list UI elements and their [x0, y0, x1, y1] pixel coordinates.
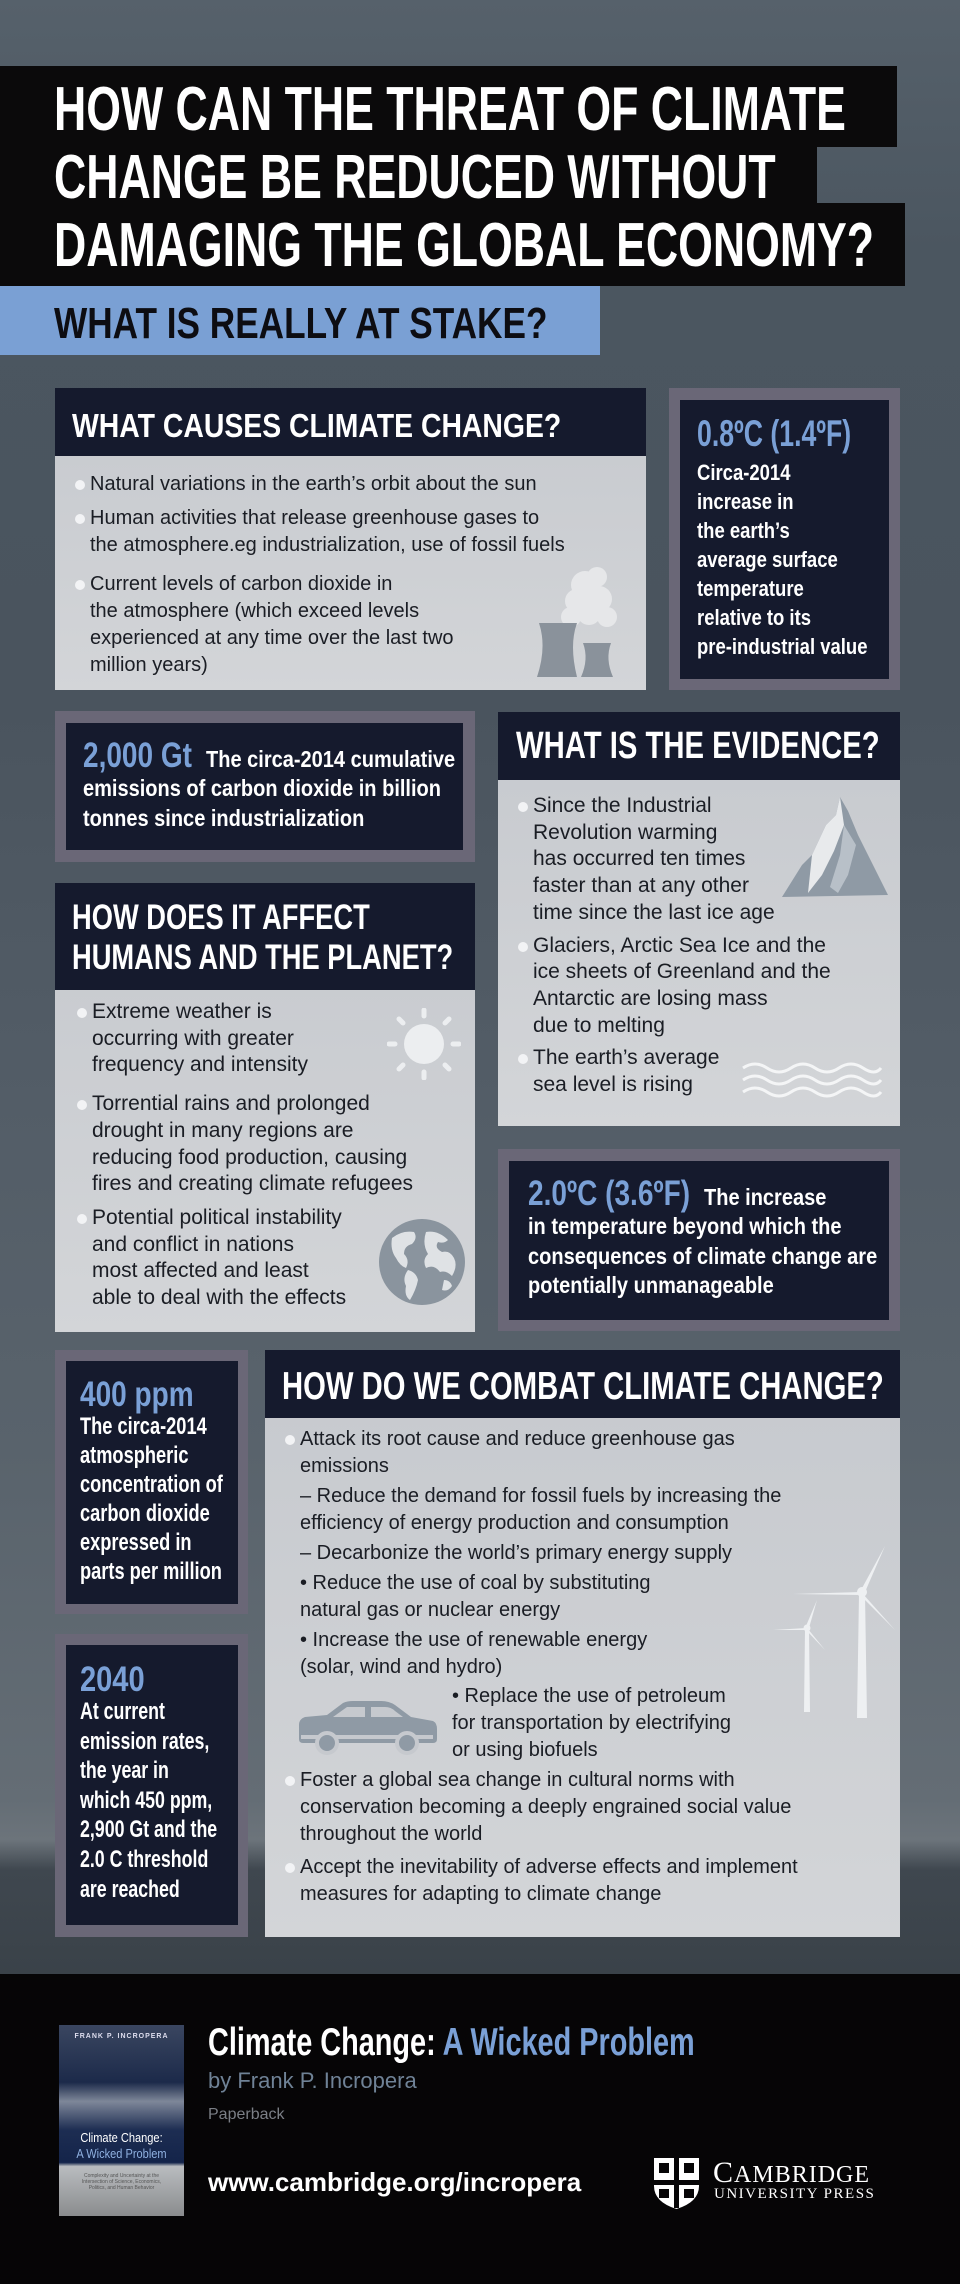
- stat: 2000 Gt: [55, 711, 475, 862]
- heading: humans: HOW DOES IT AFFECT: [72, 898, 370, 937]
- text: humans bullets: fires and creating climate refugees: [92, 1172, 413, 1195]
- heading: combat: [265, 1350, 900, 1418]
- stat: 0.8C: relative to its: [697, 605, 811, 630]
- book cover: FRANK P. INCROPERA: [74, 2033, 169, 2040]
- title: DAMAGING THE GLOBAL ECONOMY?: [54, 211, 874, 280]
- text: combat bullets: natural gas or nuclear energy: [300, 1599, 560, 1621]
- text: humans bullets: Potential political instability: [92, 1206, 342, 1229]
- text: causes bullets: the atmosphere (which exceed levels: [90, 600, 419, 622]
- text: evidence bullets: ice sheets of Greenland and the: [533, 960, 831, 983]
- panel: combat: [265, 1350, 900, 1937]
- footer: [0, 1974, 960, 2284]
- text: evidence bullets: [518, 794, 831, 1096]
- panel: evidence: [498, 712, 900, 1126]
- stat: 400 ppm: concentration of: [80, 1471, 223, 1498]
- book cover: Politics, and Human Behavior: [89, 2185, 154, 2191]
- text: humans bullets: drought in many regions are: [92, 1119, 354, 1142]
- text: humans bullets: most affected and least: [92, 1259, 309, 1282]
- text: combat bullets: conservation becoming a deeply engrained social value: [300, 1796, 791, 1818]
- icon: wind turbines: [775, 1548, 894, 1718]
- stat: 2040: At current: [80, 1698, 165, 1725]
- stat: 0.8C: 0.8ºC (1.4ºF): [697, 413, 851, 454]
- subtitle band: [0, 286, 600, 355]
- text: combat bullets: [285, 1428, 798, 1905]
- text: combat bullets: (solar, wind and hydro): [300, 1656, 502, 1678]
- text: humans bullets: reducing food production, causing: [92, 1146, 407, 1169]
- stat: 400 ppm: expressed in: [80, 1529, 192, 1556]
- text: evidence bullets: Antarctic are losing mass: [533, 987, 768, 1010]
- text: causes bullets: experienced at any time over the last two: [90, 627, 454, 649]
- title: [0, 66, 905, 286]
- stat: 400 ppm: parts per million: [80, 1558, 222, 1585]
- text: humans bullets: able to deal with the effects: [92, 1286, 346, 1309]
- text: evidence bullets: faster than at any other: [533, 874, 749, 897]
- text: humans bullets: [77, 1000, 413, 1309]
- logo: cambridge university press: CAMBRIDGE: [713, 2156, 870, 2189]
- stat: 2.0C: 2.0ºC (3.6ºF): [528, 1174, 690, 1213]
- title: CHANGE BE REDUCED WITHOUT: [54, 143, 776, 212]
- stat: 2.0C: potentially unmanageable: [528, 1272, 774, 1298]
- text: combat bullets: • Replace the use of petroleum: [452, 1685, 726, 1707]
- url: www.cambridge.org/incropera: [208, 2167, 581, 2197]
- subtitle band: WHAT IS REALLY AT STAKE?: [54, 299, 547, 348]
- heading: combat: HOW DO WE COMBAT CLIMATE CHANGE?: [282, 1365, 884, 1408]
- panel: causes: [55, 388, 646, 690]
- book cover: [59, 2025, 184, 2216]
- logo: cambridge university press: UNIVERSITY PRESS: [714, 2186, 875, 2202]
- format: Paperback: [208, 2106, 284, 2123]
- icon: waves: [742, 1062, 882, 1098]
- stat: 2040: are reached: [80, 1876, 180, 1903]
- heading: humans: [55, 883, 475, 990]
- stat: 2.0C: The increase: [704, 1184, 826, 1210]
- text: evidence bullets: Since the Industrial: [533, 794, 712, 817]
- author: by Frank P. Incropera: [208, 2068, 417, 2093]
- panel: humans and planet: [55, 883, 475, 1332]
- heading: humans: HUMANS AND THE PLANET?: [72, 938, 453, 977]
- heading: what causes: [55, 388, 646, 456]
- stat: 2040: 2040: [80, 1660, 145, 1699]
- stat: 2.0C: consequences of climate change are: [528, 1242, 877, 1268]
- stat: 2040: which 450 ppm,: [80, 1787, 212, 1814]
- stat: 400 ppm: 400 ppm: [80, 1375, 194, 1414]
- stat: 2040: emission rates,: [80, 1728, 209, 1755]
- text: combat bullets: for transportation by electrifying: [452, 1712, 731, 1734]
- text: combat bullets: Accept the inevitability of adverse effects and implement: [300, 1856, 798, 1878]
- stat: 2000 Gt: tonnes since industrialization: [83, 804, 364, 830]
- title: HOW CAN THE THREAT OF CLIMATE: [54, 75, 846, 144]
- text: causes bullets: Current levels of carbon dioxide in: [90, 573, 392, 595]
- text: combat bullets: – Reduce the demand for fossil fuels by increasing the: [300, 1485, 781, 1507]
- text: causes bullets: the atmosphere.eg industrialization, use of fossil fuels: [90, 534, 565, 556]
- text: combat bullets: • Reduce the use of coal by substituting: [300, 1572, 651, 1594]
- text: evidence bullets: The earth’s average: [533, 1046, 719, 1069]
- text: humans bullets: frequency and intensity: [92, 1053, 308, 1076]
- book title: Climate Change: A Wicked Problem: [208, 2021, 695, 2064]
- stat: 2.0C: [498, 1149, 900, 1331]
- icon: car: [299, 1701, 437, 1755]
- stat: 400 ppm: atmospheric: [80, 1442, 188, 1469]
- stat: 400 ppm: [55, 1350, 248, 1614]
- book cover: Complexity and Uncertainty at the: [84, 2173, 159, 2179]
- stat: 400 ppm: carbon dioxide: [80, 1500, 210, 1527]
- stat: 0.8C: pre-industrial value: [697, 634, 867, 659]
- stat: 0.8C: increase in: [697, 489, 794, 514]
- icon: sun: [387, 1008, 461, 1080]
- book cover: Intersection of Science, Economics,: [82, 2179, 161, 2185]
- text: causes bullets: million years): [90, 654, 208, 676]
- text: humans bullets: Torrential rains and prolonged: [92, 1092, 370, 1115]
- text: evidence bullets: has occurred ten times: [533, 847, 745, 870]
- text: combat bullets: • Increase the use of renewable energy: [300, 1629, 647, 1651]
- text: combat bullets: – Decarbonize the world’s primary energy supply: [300, 1542, 732, 1564]
- stat: 2000 Gt: emissions of carbon dioxide in billion: [83, 775, 441, 801]
- text: humans bullets: occurring with greater: [92, 1027, 294, 1050]
- text: evidence bullets: Revolution warming: [533, 821, 717, 844]
- stat: 2040: [55, 1634, 248, 1937]
- book cover: Climate Change:: [80, 2130, 163, 2145]
- icon: iceberg: [782, 797, 888, 897]
- stat: 2000 Gt: 2,000 Gt: [83, 736, 192, 775]
- stat: 400 ppm: The circa-2014: [80, 1413, 207, 1440]
- stat: 0.8C: [669, 388, 900, 690]
- icon: globe: [379, 1219, 465, 1305]
- text: causes bullets: [75, 473, 565, 676]
- stat: 0.8C: average surface: [697, 547, 838, 572]
- text: evidence bullets: due to melting: [533, 1014, 665, 1037]
- text: causes bullets: Human activities that release greenhouse gases to: [90, 507, 539, 529]
- stat: 2040: the year in: [80, 1757, 169, 1784]
- text: combat bullets: throughout the world: [300, 1823, 482, 1845]
- stat: 0.8C: temperature: [697, 576, 804, 601]
- text: evidence bullets: sea level is rising: [533, 1073, 693, 1096]
- stat: 2.0C: in temperature beyond which the: [528, 1213, 842, 1239]
- stat: 0.8C: Circa-2014: [697, 460, 791, 485]
- stat: 2000 Gt: The circa-2014 cumulative: [206, 746, 455, 772]
- text: humans bullets: Extreme weather is: [92, 1000, 272, 1023]
- text: combat bullets: Foster a global sea change in cultural norms with: [300, 1769, 735, 1791]
- icon: cooling towers: [537, 567, 617, 677]
- stat: 0.8C: the earth’s: [697, 518, 790, 543]
- logo: cambridge university press: [654, 2156, 875, 2209]
- text: combat bullets: Attack its root cause and reduce greenhouse gas: [300, 1428, 735, 1450]
- heading: evidence: [498, 712, 900, 780]
- text: combat bullets: efficiency of energy production and consumption: [300, 1512, 729, 1534]
- text: combat bullets: emissions: [300, 1455, 389, 1477]
- text: combat bullets: or using biofuels: [452, 1739, 598, 1761]
- text: evidence bullets: Glaciers, Arctic Sea Ice and the: [533, 934, 826, 957]
- stat: 2040: 2.0 C threshold: [80, 1846, 208, 1873]
- text: causes bullets: Natural variations in the earth’s orbit about the sun: [90, 473, 537, 495]
- heading: evidence: WHAT IS THE EVIDENCE?: [516, 725, 880, 767]
- text: evidence bullets: time since the last ice age: [533, 901, 775, 924]
- book cover: A Wicked Problem: [76, 2146, 167, 2161]
- heading: what causes: WHAT CAUSES CLIMATE CHANGE?: [72, 407, 561, 444]
- text: humans bullets: and conflict in nations: [92, 1233, 294, 1256]
- stat: 2040: 2,900 Gt and the: [80, 1816, 217, 1843]
- text: combat bullets: measures for adapting to climate change: [300, 1883, 661, 1905]
